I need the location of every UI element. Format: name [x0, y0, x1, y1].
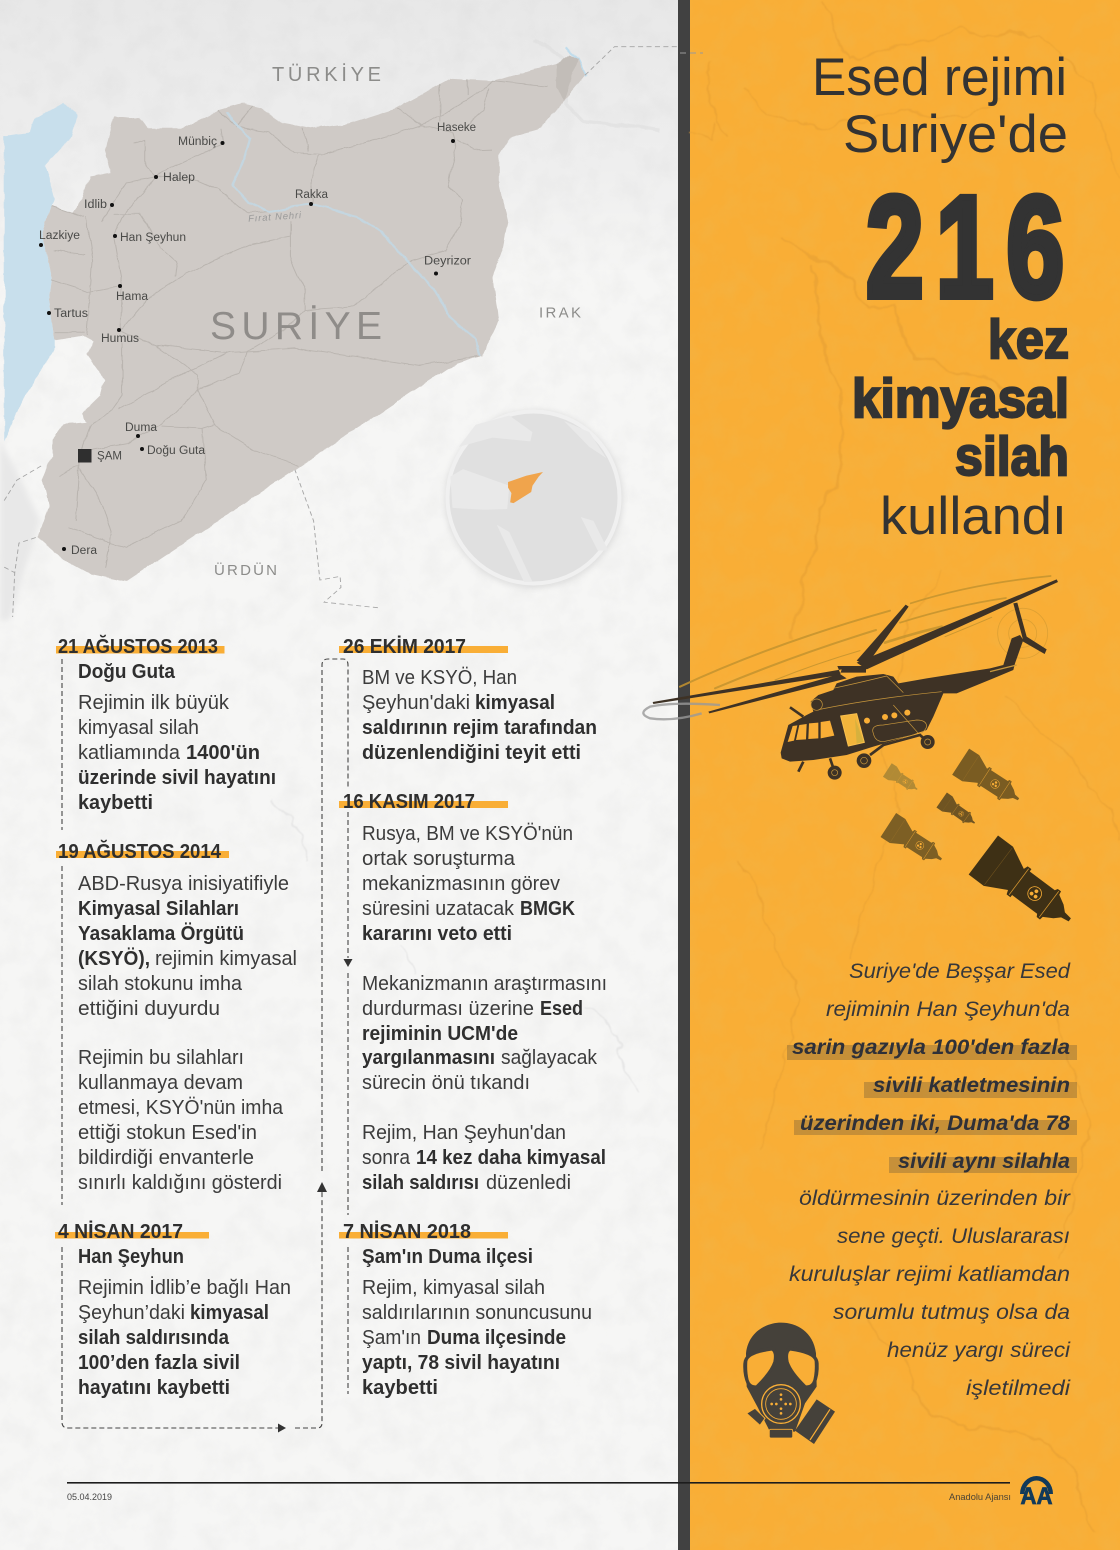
body paragraph: sivili katletmesinin: [873, 1074, 1070, 1097]
timeline item: 16 Kasım 2017: yargılanmasını: [362, 1047, 495, 1069]
timeline item: 16 Kasım 2017: silah saldırısı: [362, 1172, 479, 1194]
timeline item: 4 Nisan 2017: 4 NİSAN 2017: [58, 1220, 183, 1243]
timeline arrowheads: [278, 959, 352, 1432]
firat river: [227, 112, 480, 356]
timeline item: 16 Kasım 2017: Rusya, BM ve KSYÖ'nün: [362, 823, 573, 845]
headline: silah: [955, 425, 1069, 487]
timeline item: 4 Nisan 2017: 100’den fazla sivil: [78, 1352, 240, 1374]
city labels: Han Şeyhun: [120, 232, 186, 244]
timeline item: 16 Kasım 2017: kararını veto etti: [362, 923, 512, 945]
icon: gas mask: [743, 1323, 835, 1444]
body paragraph: sarin gazıyla 100'den fazla: [792, 1036, 1070, 1059]
timeline item: 16 Kasım 2017: durdurması üzerine: [362, 998, 534, 1020]
headline: Esed rejimi: [812, 48, 1067, 107]
timeline item: 16 Kasım 2017: sonra: [362, 1147, 411, 1169]
sea: [4, 40, 660, 441]
timeline item: 4 Nisan 2017: Şeyhun’daki: [78, 1302, 185, 1324]
timeline item: 16 Kasım 2017: Rejim, Han Şeyhun'dan: [362, 1122, 566, 1144]
timeline item: 21 Ağustos 2013: kimyasal silah: [78, 717, 199, 739]
timeline item: 19 Ağustos 2014: Yasaklama Örgütü: [78, 922, 244, 945]
timeline item: 26 Ekim 2017: [339, 635, 597, 764]
timeline item: 19 Ağustos 2014: sınırlı kaldığını gösterdi: [78, 1172, 282, 1194]
big number 216: 216: [866, 166, 1064, 327]
timeline item: 16 Kasım 2017: ortak soruşturma: [362, 848, 516, 870]
body paragraph: kuruluşlar rejimi katliamdan: [789, 1263, 1070, 1286]
panel: syria map: [4, 40, 682, 617]
timeline item: 21 Ağustos 2013: üzerinde sivil hayatını: [78, 767, 276, 789]
bomb: large: [969, 835, 1084, 939]
timeline item: 7 Nisan 2018: yaptı, 78 sivil hayatını: [362, 1352, 560, 1374]
city labels: Dera: [71, 545, 98, 557]
country labels: IRAK: [539, 304, 581, 322]
timeline item: 19 Ağustos 2014: rejimin kimyasal: [155, 948, 297, 970]
timeline item: 16 Kasım 2017: düzenledi: [486, 1172, 571, 1194]
illustration: helicopter dropping bombs: [643, 576, 1084, 939]
timeline item: 19 Ağustos 2014: ABD-Rusya inisiyatifiyle: [78, 873, 289, 895]
timeline item: 19 Ağustos 2014: [56, 839, 297, 1194]
city labels: Tartus: [54, 308, 88, 320]
syria outline and roads: [38, 54, 585, 582]
timeline item: 16 Kasım 2017: BMGK: [520, 898, 575, 920]
timeline item: 16 Kasım 2017: sağlayacak: [501, 1047, 598, 1069]
timeline item: 7 Nisan 2018: Duma ilçesinde: [427, 1327, 566, 1349]
city labels: Deyrizor: [424, 256, 471, 268]
timeline item: 26 Ekim 2017: düzenlendiğini teyit etti: [362, 742, 581, 764]
country labels: ÜRDÜN: [214, 561, 277, 579]
timeline item: 19 Ağustos 2014: (KSYÖ),: [78, 947, 150, 970]
timeline item: 21 Ağustos 2013: Rejimin ilk büyük: [78, 692, 230, 714]
timeline item: 19 Ağustos 2014: ettiğini duyurdu: [78, 998, 220, 1020]
timeline item: 26 Ekim 2017: kimyasal: [475, 692, 555, 714]
body paragraph: üzerinden iki, Duma'da 78: [800, 1112, 1070, 1135]
bomb: small: [936, 793, 980, 831]
body paragraph: Suriye'de Beşşar Esed: [849, 960, 1071, 983]
timeline item: 21 Ağustos 2013: katliamında: [78, 742, 181, 764]
timeline item: 21 Ağustos 2013: [56, 634, 276, 814]
city labels: Humus: [101, 333, 139, 345]
timeline item: 26 Ekim 2017: Şeyhun'daki: [362, 692, 470, 714]
timeline item: 4 Nisan 2017: [55, 1220, 291, 1399]
timeline item: 16 Kasım 2017: 16 KASIM 2017: [343, 791, 475, 813]
city labels: Münbiç: [178, 136, 217, 148]
logo: AA: AA: [1020, 1483, 1052, 1510]
timeline item: 26 Ekim 2017: saldırının rejim tarafından: [362, 717, 597, 739]
bomb: small faded: [883, 763, 922, 796]
timeline item: 19 Ağustos 2014: Rejimin bu silahları: [78, 1047, 244, 1069]
timeline item: 4 Nisan 2017: kimyasal: [190, 1302, 269, 1324]
body paragraph: rejiminin Han Şeyhun'da: [826, 998, 1070, 1021]
city labels: Idlib: [84, 199, 107, 211]
timeline item: 21 Ağustos 2013: 1400'ün: [186, 742, 260, 764]
timeline item: 19 Ağustos 2014: Kimyasal Silahları: [78, 898, 239, 920]
dashed borders: [4, 47, 682, 617]
country labels: [210, 63, 581, 579]
body paragraph: sivili aynı silahla: [898, 1150, 1070, 1173]
timeline item: 19 Ağustos 2014: silah stokunu imha: [78, 973, 243, 995]
body paragraph: işletilmedi: [966, 1377, 1071, 1400]
timeline item: 16 Kasım 2017: Esed: [540, 998, 583, 1020]
body paragraph: [789, 960, 1071, 1400]
timeline item: 16 Kasım 2017: rejiminin UCM'de: [362, 1023, 518, 1045]
country labels: TÜRKİYE: [272, 63, 381, 86]
timeline item: 7 Nisan 2018: Şam'ın: [362, 1327, 421, 1349]
city labels: Lazkiye: [39, 230, 80, 242]
timeline item: 19 Ağustos 2014: 19 AĞUSTOS 2014: [58, 839, 222, 863]
city labels: Rakka: [295, 189, 329, 201]
helicopter body: [653, 579, 1058, 780]
timeline item: 21 Ağustos 2013: Doğu Guta: [78, 661, 176, 683]
bomb: medium upper: [952, 749, 1027, 812]
panel: paper background: [0, 0, 680, 1550]
rotor motion blur: [680, 576, 1051, 688]
timeline item: 7 Nisan 2018: Rejim, kimyasal silah: [362, 1277, 545, 1299]
timeline item: 21 Ağustos 2013: 21 AĞUSTOS 2013: [58, 634, 218, 658]
timeline item: 16 Kasım 2017: mekanizmasının görev: [362, 873, 560, 895]
city labels: Doğu Guta: [147, 445, 206, 457]
panel: orange right column: [678, 0, 1120, 1550]
timeline item: 19 Ağustos 2014: bildirdiği envanterle: [78, 1147, 254, 1169]
bomb: medium lower: [881, 813, 949, 871]
timeline item: 16 Kasım 2017: 14 kez daha kimyasal: [416, 1147, 606, 1169]
timeline item: 4 Nisan 2017: Rejimin İdlib’e bağlı Han: [78, 1276, 291, 1299]
city labels: Fırat Nehri: [248, 210, 302, 225]
headline: Suriye'de: [843, 105, 1068, 164]
timeline item: 7 Nisan 2018: Şam'ın Duma ilçesi: [362, 1246, 533, 1268]
timeline item: 16 Kasım 2017: [339, 791, 607, 1194]
city dots: [39, 139, 455, 551]
headline: kullandı: [880, 487, 1067, 546]
city labels: Haseke: [437, 122, 476, 134]
city labels: ŞAM: [97, 450, 122, 462]
timeline item: 4 Nisan 2017: hayatını kaybetti: [78, 1377, 230, 1399]
footer: 05.04.2019: [67, 1492, 112, 1503]
headline: kez: [988, 308, 1069, 370]
timeline item: 21 Ağustos 2013: kaybetti: [78, 792, 153, 814]
timeline item: 4 Nisan 2017: Han Şeyhun: [78, 1246, 184, 1268]
mini syria: [508, 472, 543, 503]
city labels: Hama: [116, 291, 149, 303]
body paragraph: sorumlu tutmuş olsa da: [833, 1301, 1070, 1324]
rotor ring over the divider: [643, 704, 720, 719]
timeline item: 19 Ağustos 2014: ettiği stokun Esed'in: [78, 1122, 257, 1144]
timeline item: 16 Kasım 2017: Mekanizmanın araştırmasını: [362, 973, 607, 995]
timeline item: 26 Ekim 2017: BM ve KSYÖ, Han: [362, 667, 517, 689]
body paragraph: henüz yargı süreci: [887, 1339, 1071, 1362]
timeline item: 7 Nisan 2018: saldırılarının sonuncusunu: [362, 1302, 592, 1324]
city labels: Halep: [163, 172, 195, 184]
timeline item: 26 Ekim 2017: 26 EKİM 2017: [343, 635, 466, 658]
timeline connector dashes: [62, 659, 348, 1428]
timeline item: 7 Nisan 2018: kaybetti: [362, 1377, 438, 1399]
headline: [812, 48, 1069, 546]
timeline item: 7 Nisan 2018: 7 NİSAN 2018: [343, 1220, 471, 1243]
city labels: [39, 122, 476, 557]
footer: Anadolu Ajansı: [949, 1492, 1011, 1503]
city labels: Duma: [125, 422, 158, 434]
timeline item: 4 Nisan 2017: silah saldırısında: [78, 1327, 230, 1349]
timeline item: 19 Ağustos 2014: etmesi, KSYÖ'nün imha: [78, 1097, 284, 1119]
timeline item: 7 Nisan 2018: [339, 1220, 592, 1399]
footer: [67, 1476, 1053, 1510]
timeline item: 16 Kasım 2017: sürecin önü tıkandı: [362, 1072, 530, 1094]
body paragraph: sene geçti. Uluslararası: [837, 1225, 1070, 1248]
timeline item: 19 Ağustos 2014: kullanmaya devam: [78, 1072, 243, 1094]
headline: kimyasal: [852, 367, 1069, 429]
globe locator: [445, 410, 623, 588]
timeline item: 16 Kasım 2017: süresini uzatacak: [362, 898, 515, 920]
body paragraph highlights: [787, 1045, 1077, 1173]
country labels: SURİYE: [210, 305, 382, 348]
body paragraph: öldürmesinin üzerinden bir: [799, 1187, 1071, 1210]
